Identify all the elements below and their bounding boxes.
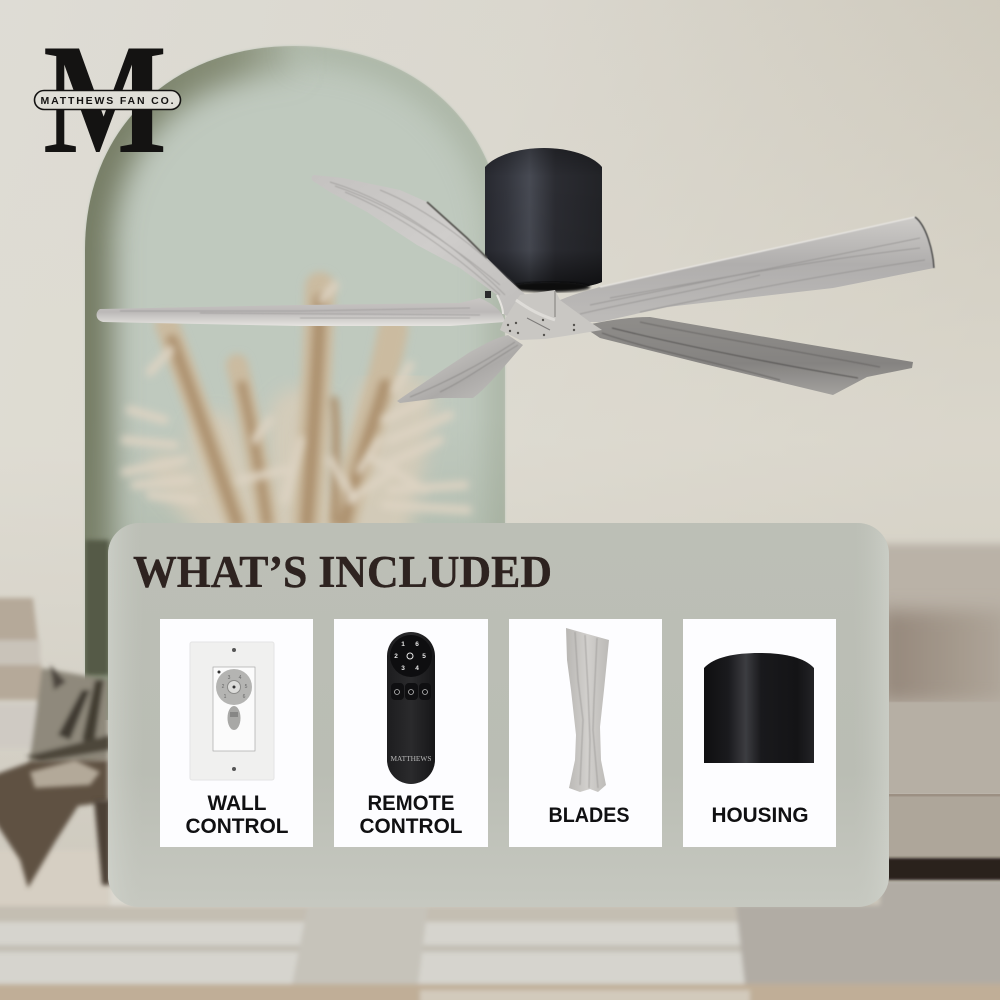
icon: wall control: 3 <box>228 675 231 681</box>
blade: lower left <box>397 335 523 403</box>
icon: remote: 2 <box>394 653 398 660</box>
logo letter M: M <box>43 12 167 187</box>
icon: remote: MATTHEWS <box>390 754 432 763</box>
icon: remote <box>387 632 435 784</box>
icon: remote: 5 <box>422 653 426 660</box>
heading: WHAT’S INCLUDED <box>133 547 552 597</box>
icon: black housing <box>704 653 814 763</box>
logo name pill: MATTHEWS FAN CO. <box>40 95 174 107</box>
icon: wall control: 6 <box>243 694 246 700</box>
blade: lower right <box>582 317 913 395</box>
icon: wood blade <box>566 628 609 792</box>
icon: wall control: 1 <box>224 694 227 700</box>
logo name pill <box>34 90 180 110</box>
icon: remote: 1 <box>401 641 405 648</box>
icon: wall control: 5 <box>245 684 248 690</box>
icon: wall control: 2 <box>222 684 225 690</box>
card: blades <box>509 619 662 847</box>
icon: remote: 3 <box>401 665 405 672</box>
fan housing <box>485 148 602 298</box>
logo <box>34 12 180 187</box>
icon: wall control <box>190 642 274 780</box>
armchair at left <box>0 598 110 888</box>
sofa at right <box>880 544 1000 880</box>
icon: wall control: 4 <box>239 675 242 681</box>
blade: upper left <box>312 175 540 322</box>
blurred pampas grass <box>125 285 468 525</box>
label: wall control: WALL <box>208 791 266 815</box>
label: wall control <box>186 791 288 838</box>
card: wall control <box>160 619 313 847</box>
label: wall control: CONTROL <box>186 814 288 838</box>
panel: what's included <box>108 523 889 907</box>
fan hub with screws <box>500 290 602 340</box>
blade: upper right <box>560 217 934 322</box>
label: blades: BLADES <box>548 803 630 827</box>
icon: remote: 4 <box>415 665 419 672</box>
floor <box>0 850 1000 1000</box>
card: housing <box>683 619 836 847</box>
label: remote control: CONTROL <box>360 814 462 838</box>
icon: remote: 6 <box>415 641 419 648</box>
blade: left <box>97 298 505 326</box>
arched wall niche <box>85 46 505 720</box>
fan <box>97 148 934 403</box>
label: remote control <box>360 791 462 838</box>
card: remote control <box>334 619 488 847</box>
label: remote control: REMOTE <box>368 791 454 815</box>
label: housing: HOUSING <box>712 803 808 827</box>
